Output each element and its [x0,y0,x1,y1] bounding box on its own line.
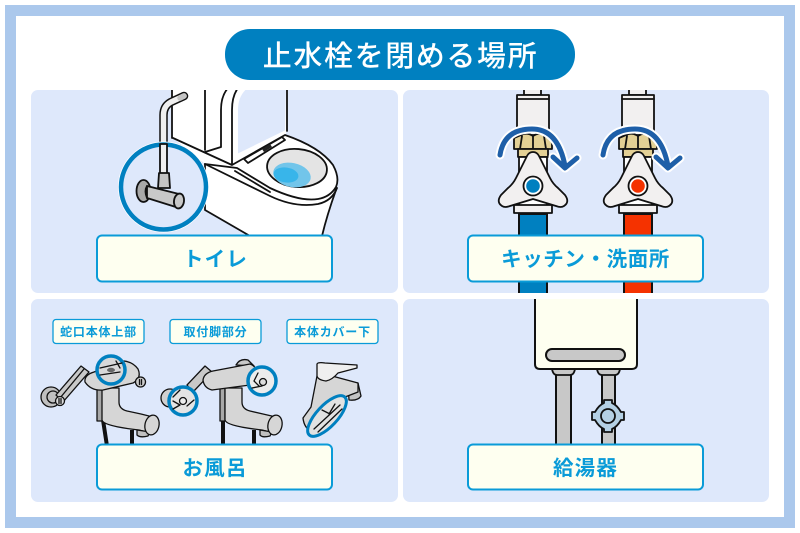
detail circle left [168,386,198,416]
panel: water heater [403,296,769,502]
detail ellipse [302,390,352,442]
detail circle [96,354,126,386]
label: water heater [468,444,703,490]
water heater illustration [535,296,637,446]
title [225,29,575,80]
faucet three [302,363,361,442]
sub label: spout body top: 蛇口本体上部 [60,324,137,339]
label: toilet: トイレ [183,248,248,271]
panel: bath [31,299,398,502]
faucet two [161,360,284,446]
sub label: under body cover [287,320,378,344]
label: kitchen and washroom [468,236,703,282]
icon: valve knob [592,400,624,432]
icon: stop valve [136,144,185,209]
panel: toilet [31,88,398,293]
sub label: under body cover: 本体カバー下 [294,324,371,339]
hot water valve [603,88,680,296]
panel: kitchen and washroom [403,88,769,296]
faucet one [41,354,161,446]
sub label: mounting leg [170,320,261,344]
icon: supply pipe [164,96,184,150]
magnifier circle [120,143,208,231]
sub label: mounting leg: 取付脚部分 [183,324,248,339]
label: kitchen and washroom: キッチン・洗面所 [501,248,670,271]
detail circle right [246,366,278,396]
label: toilet [97,236,332,282]
icon: turn arrow [500,129,577,168]
label: water heater: 給湯器 [553,457,618,480]
label: bath [97,444,332,490]
sub label: spout body top [53,320,144,344]
toilet illustration [172,88,337,236]
cold water valve [499,88,577,296]
icon: turn arrow hot [603,129,680,168]
title: 止水栓を閉める場所 [263,40,538,73]
label: bath: お風呂 [182,457,248,480]
